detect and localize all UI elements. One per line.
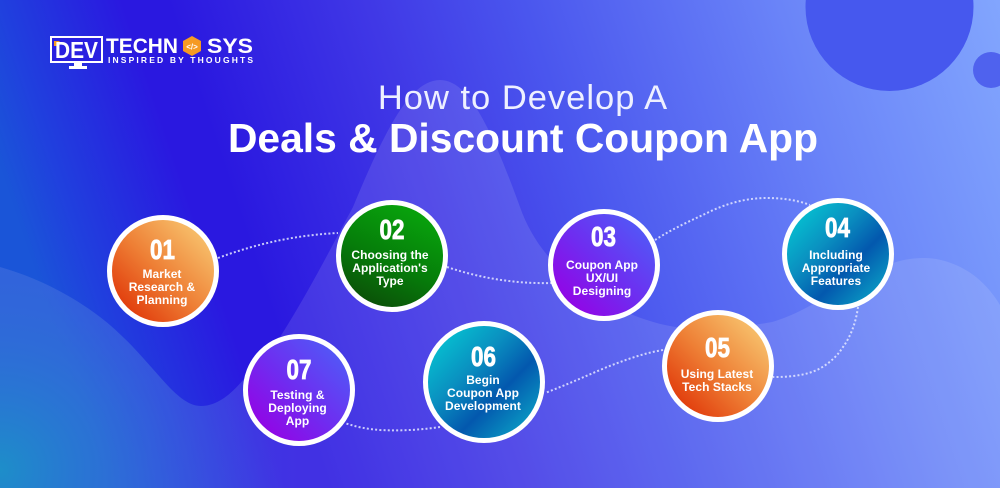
step 06: Development [445, 399, 521, 413]
subtitle heading: Deals & Discount Coupon App [228, 115, 818, 161]
step 02: Type [376, 274, 404, 288]
logo: wordmark TECHN: TECHN [106, 35, 178, 58]
step 07 [243, 334, 355, 446]
step 07: Testing & [270, 388, 325, 402]
step 04: Including [809, 248, 863, 262]
step 02: Choosing the [351, 248, 429, 262]
step 06: Begin [466, 373, 500, 387]
decorative circle top right [806, 0, 974, 91]
logo: monitor icon: DEV [55, 37, 99, 63]
step 07: 07 [287, 354, 311, 385]
step 01: Research & [129, 280, 195, 294]
step 04 [782, 198, 894, 310]
step 01: 01 [150, 234, 175, 265]
step 06 [423, 321, 545, 443]
step 01 [107, 215, 219, 327]
step 04: Appropriate [802, 261, 870, 275]
step 04: Features [811, 274, 861, 288]
step 02 [336, 200, 448, 312]
logo: hexagon code badge [183, 36, 201, 56]
step 05: Tech Stacks [682, 380, 752, 394]
logo: wordmark SYS: SYS [207, 35, 253, 58]
logo: tagline: INSPIRED BY THOUGHTS [108, 55, 253, 65]
step 03: Designing [573, 284, 631, 298]
step 05: Using Latest [681, 367, 753, 381]
logo: hexagon code badge: </> [186, 42, 198, 52]
step 03 [548, 209, 660, 321]
step 03: 03 [591, 221, 616, 252]
step 02: 02 [380, 214, 404, 245]
step 05 [662, 310, 774, 422]
step 06: Coupon App [447, 386, 519, 400]
step 01: Planning [136, 293, 188, 307]
dotted connector paths [218, 198, 858, 430]
step 01: Market [142, 267, 181, 281]
step 07: App [286, 414, 309, 428]
step 04: 04 [825, 212, 850, 243]
title: How to Develop A [378, 79, 668, 117]
step 03: Coupon App [566, 258, 638, 272]
step 07: Deploying [268, 401, 327, 415]
step 02: Application's [352, 261, 428, 275]
step 03: UX/UI [586, 271, 618, 285]
logo [50, 35, 253, 69]
step 06: 06 [471, 341, 496, 372]
small decorative circle [973, 52, 1000, 88]
step 05: 05 [705, 332, 730, 363]
